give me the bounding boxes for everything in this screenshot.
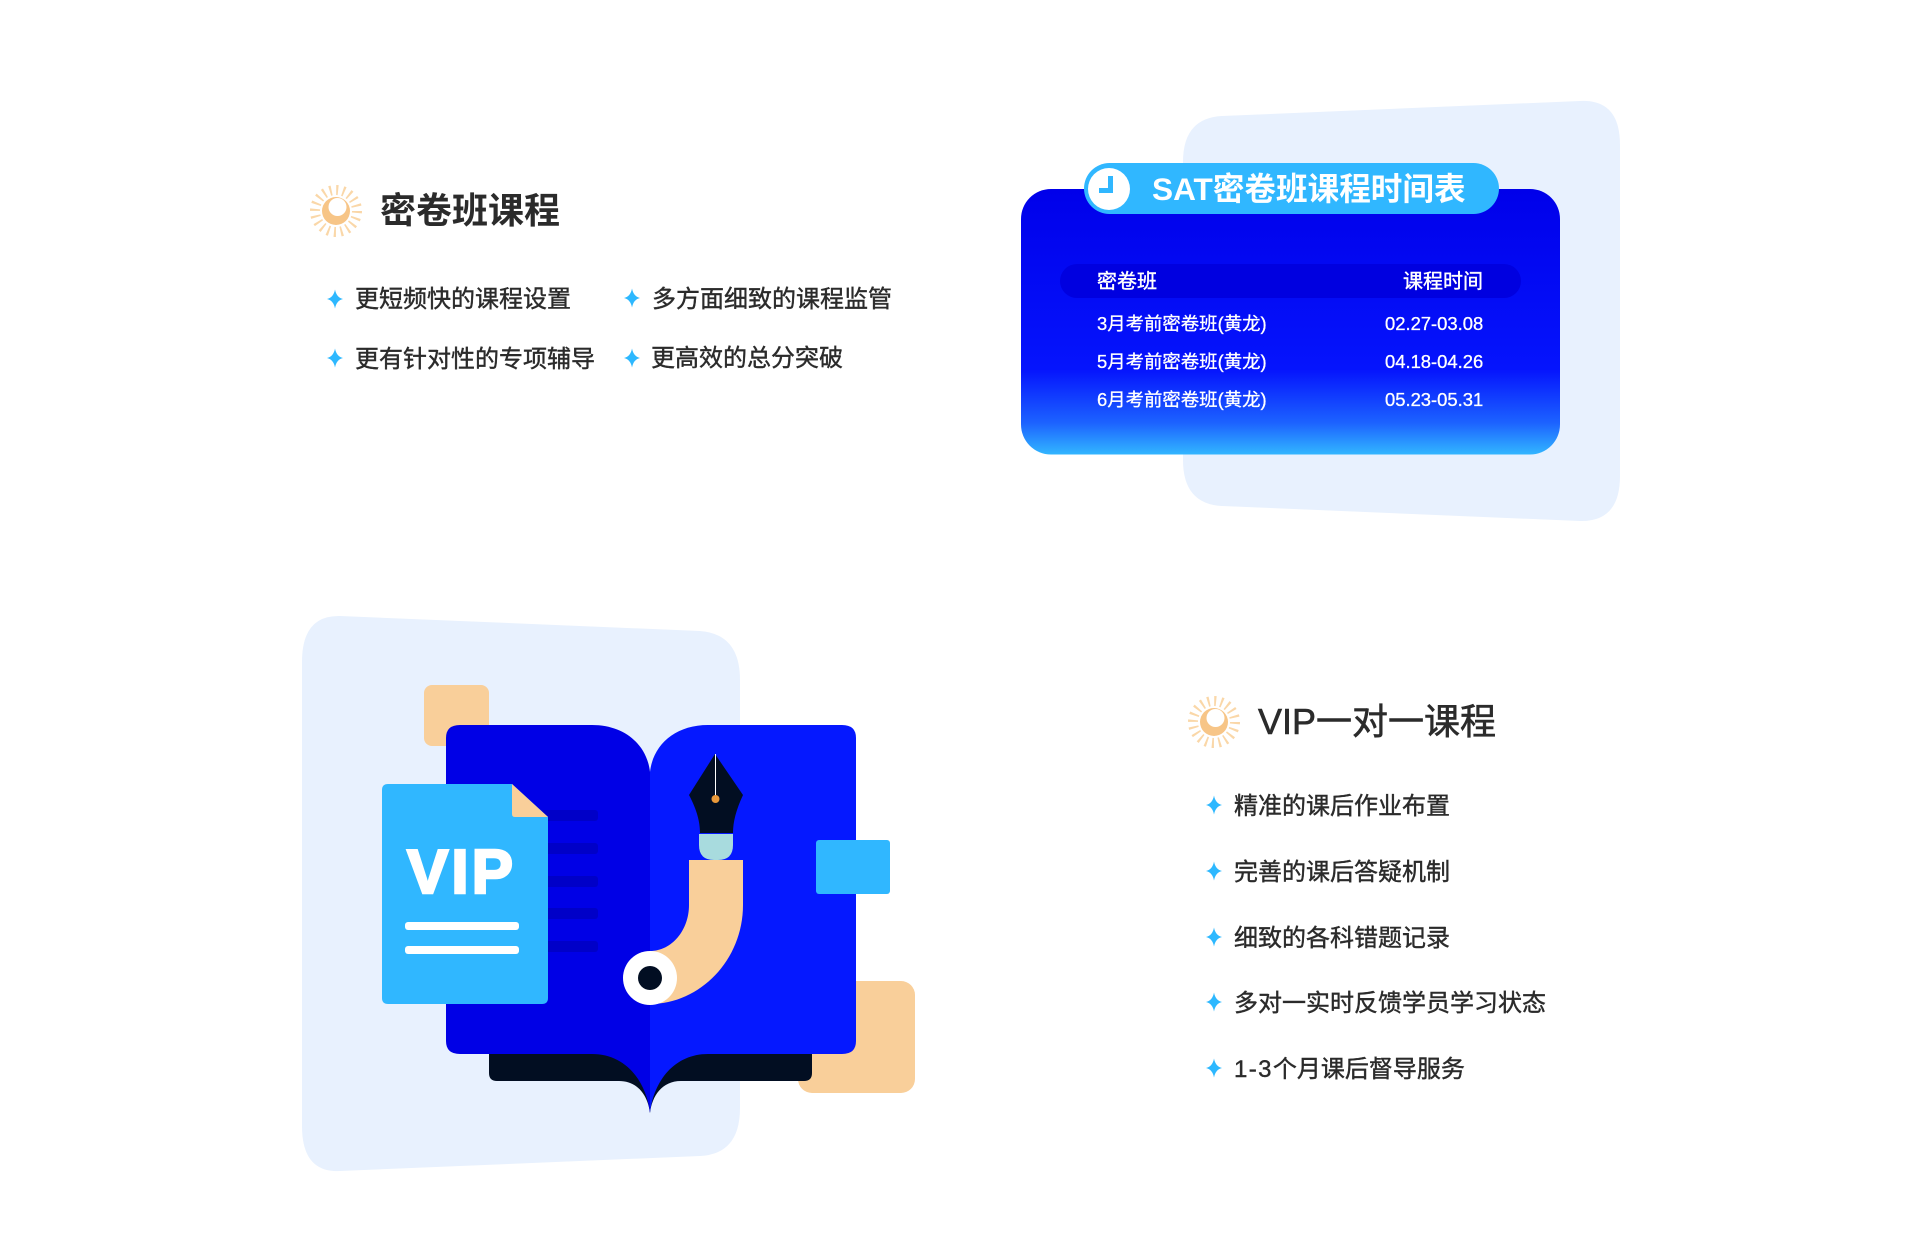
VIP document — [382, 784, 548, 1004]
bullet: 细致的各科错题记录: 细致的各科错题记录 — [1234, 925, 1450, 952]
bullet list — [327, 286, 892, 373]
table row: May — [1097, 351, 1483, 372]
table header: 密卷班 — [1097, 270, 1157, 293]
bullet: 完善的课后答疑机制: 完善的课后答疑机制 — [1234, 859, 1450, 886]
background shape — [1183, 101, 1620, 521]
bullet: 1-3个月课后督导服务: 1-3个月课后督导服务 — [1234, 1056, 1465, 1083]
book right page — [650, 725, 856, 1113]
icon: clock — [1088, 168, 1130, 210]
bullet: 更有针对性的专项辅导: 更有针对性的专项辅导 — [355, 346, 595, 373]
background shape — [302, 616, 740, 1171]
panel: course intro, top left — [315, 190, 892, 373]
pen nib — [689, 754, 743, 860]
icon: sun — [1193, 701, 1235, 743]
pen end — [623, 951, 677, 1005]
illustration: open book with VIP document and pen — [302, 616, 915, 1171]
table row: March: 02.27-03.08 — [1385, 313, 1483, 334]
table row: May: 04.18-04.26 — [1385, 351, 1483, 372]
bullet: 精准的课后作业布置: 精准的课后作业布置 — [1234, 793, 1450, 820]
table header — [1060, 264, 1521, 298]
bullet list — [1206, 793, 1546, 1083]
table row: May: 5月考前密卷班(黄龙) — [1097, 351, 1267, 372]
table header: 课程时间 — [1403, 270, 1483, 293]
table row: March: 3月考前密卷班(黄龙) — [1097, 313, 1267, 334]
heading: VIP一对一课程: VIP一对一课程 — [1258, 701, 1496, 742]
table row: March — [1097, 313, 1483, 334]
table row: June: 6月考前密卷班(黄龙) — [1097, 389, 1267, 410]
title pill — [1084, 163, 1499, 214]
panel: VIP course list, bottom right — [1193, 701, 1546, 1083]
schedule card — [1021, 189, 1560, 454]
panel: SAT schedule, top right — [1021, 101, 1620, 521]
table row: June — [1097, 389, 1483, 410]
orange square, top — [424, 685, 489, 746]
book left page — [446, 725, 650, 1113]
pen body — [650, 860, 743, 1004]
bullet: 多方面细致的课程监管: 多方面细致的课程监管 — [652, 286, 892, 313]
VIP document: VIP — [407, 838, 513, 907]
schedule title: SAT密卷班课程时间表 — [1152, 171, 1466, 207]
icon: sun — [315, 190, 357, 232]
text lines on left page — [540, 810, 598, 952]
bullet: 更短频快的课程设置: 更短频快的课程设置 — [355, 286, 571, 313]
book back cover — [489, 1054, 812, 1113]
blue bookmark tab — [816, 840, 890, 894]
bullet: 更高效的总分突破: 更高效的总分突破 — [651, 345, 843, 372]
table row: June: 05.23-05.31 — [1385, 389, 1483, 410]
heading: 密卷班课程: 密卷班课程 — [380, 190, 560, 231]
orange square, bottom right — [798, 981, 915, 1093]
bullet: 多对一实时反馈学员学习状态: 多对一实时反馈学员学习状态 — [1234, 990, 1546, 1017]
